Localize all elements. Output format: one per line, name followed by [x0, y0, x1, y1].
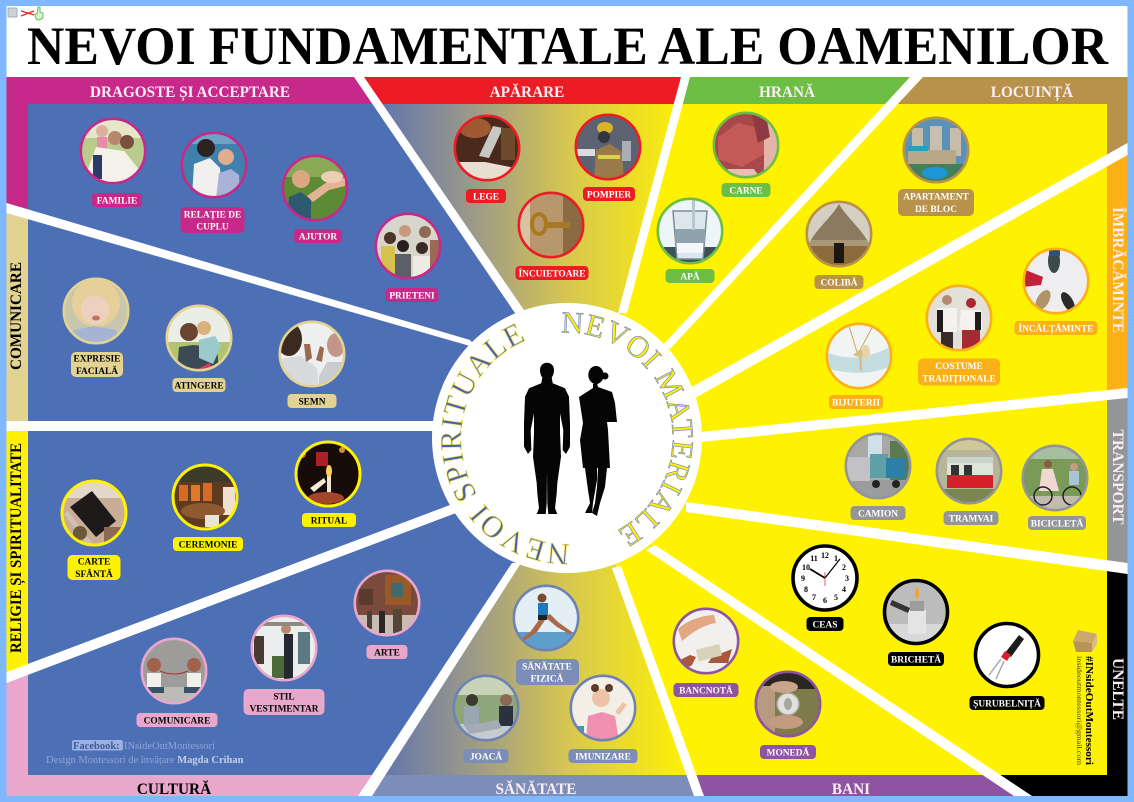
label: FAMILIE [97, 196, 137, 206]
label: SEMN [298, 398, 326, 408]
contact text: #INsideOutMontessori [1083, 656, 1095, 765]
label: STIL [273, 692, 295, 702]
label [898, 189, 974, 216]
label: CEAS [812, 620, 838, 630]
item: joaca [453, 675, 519, 763]
panel: transport [684, 398, 1128, 563]
label: BIJUTERII [832, 398, 880, 408]
label: CARTE [78, 558, 110, 568]
photo [454, 115, 520, 182]
heading: LOCUINȚĂ [991, 84, 1073, 101]
panel: imbracaminte [696, 155, 1128, 432]
panel: religie si spiritualitate [6, 431, 450, 672]
label: PRIETENI [389, 292, 435, 302]
icon: clock: 8 [804, 585, 808, 594]
item: moneda [755, 671, 821, 759]
photo [63, 278, 129, 344]
icon: clock: 2 [842, 563, 846, 572]
icon: clock [793, 546, 857, 610]
panel: dragoste si acceptare [6, 77, 516, 342]
item: ajutor [282, 155, 348, 243]
label: FIZICĂ [531, 672, 564, 684]
photo [166, 305, 232, 371]
label [244, 689, 324, 715]
item: bancnota [673, 608, 739, 697]
heading: HRANĂ [759, 84, 815, 101]
panel: aparare [364, 77, 681, 314]
label: SĂNĂTATE [522, 660, 572, 672]
item: lege [454, 115, 520, 203]
photo [926, 285, 992, 351]
photo [673, 608, 739, 674]
label: SFÂNTĂ [75, 568, 113, 580]
label: ÎNCUIETOARE [518, 268, 586, 280]
photo [354, 570, 420, 636]
item: apa [657, 198, 723, 283]
photo [295, 441, 361, 507]
item: semn [276, 321, 345, 408]
label [918, 358, 1000, 386]
label: RITUAL [311, 516, 347, 526]
item: imunizare [568, 675, 638, 763]
heading: RELIGIE ȘI SPIRITUALITATE [8, 443, 25, 653]
item: incaltaminte [1014, 248, 1098, 335]
item: bricheta [883, 579, 949, 666]
credit text [46, 740, 244, 766]
label: CARNE [729, 186, 763, 196]
title: NEVOI FUNDAMENTALE ALE OAMENILOR [27, 16, 1109, 76]
credit text: Facebook: [73, 741, 120, 752]
item: ritual [295, 441, 361, 527]
toolbar icons [8, 7, 43, 20]
credit text: INsideOutMontessori [124, 741, 215, 752]
photo [1022, 445, 1088, 511]
photo [657, 198, 723, 264]
label: RELAȚIE DE [184, 210, 241, 220]
photo [375, 213, 441, 279]
label: ȘURUBELNIȚĂ [973, 698, 1041, 710]
label: VESTIMENTAR [249, 704, 319, 714]
label [180, 207, 244, 233]
icon: clock: 12 [821, 551, 829, 560]
icon: clock: 9 [801, 574, 805, 583]
heading: DRAGOSTE ȘI ACCEPTARE [90, 84, 290, 101]
item: ceas [793, 546, 857, 631]
item: surubelnita [970, 622, 1044, 710]
label: BICICLETĂ [1031, 518, 1084, 530]
label [516, 659, 579, 685]
contact text: insideoutmontessori@gmail.com [1075, 656, 1084, 765]
photo [513, 585, 579, 651]
photo [570, 675, 636, 741]
icon: clock: 1 [834, 554, 838, 563]
heading: CULTURĂ [137, 781, 211, 798]
heading: ÎMBRĂCĂMINTE [1109, 207, 1126, 333]
label: POMPIER [587, 190, 631, 200]
label: APARTAMENT [903, 192, 969, 202]
photo [172, 464, 238, 530]
label [71, 352, 123, 377]
curved text: nevoi materiale: NEVOI MATERIALE [562, 312, 694, 547]
panel: sanatate [372, 564, 694, 796]
label: TRADIȚIONALE [922, 374, 996, 384]
heading: BANI [832, 781, 870, 798]
credit text: Design Montessori de învățare Magda Crihan [46, 755, 244, 766]
item: costume traditionale [918, 285, 1000, 386]
label: ATINGERE [174, 382, 224, 392]
heading: SĂNĂTATE [495, 781, 577, 798]
icon: clock: 6 [823, 596, 827, 605]
label: MONEDĂ [767, 746, 810, 758]
item: arte [354, 570, 420, 659]
item: relatie de cuplu [180, 132, 247, 233]
photo [974, 622, 1040, 688]
label: AJUTOR [299, 232, 337, 242]
label [68, 555, 120, 580]
label: CEREMONIE [179, 540, 237, 550]
photo [61, 480, 127, 546]
label: BRICHETĂ [891, 654, 941, 666]
item: expresie faciala [63, 278, 129, 377]
panel: comunicare [6, 213, 469, 421]
panel: unelte [649, 506, 1128, 796]
item: apartament de bloc [898, 117, 974, 216]
item: coliba [806, 201, 872, 289]
item: bicicleta [1022, 445, 1088, 530]
photo [903, 117, 969, 183]
label: TRAMVAI [949, 514, 994, 524]
icon: clock: 10 [802, 563, 810, 572]
curved text: nevoi spirituale: NEVOI SPIRITUALE [440, 323, 570, 565]
item: carne [713, 112, 779, 197]
label: LEGE [473, 192, 499, 202]
photo [282, 155, 348, 221]
icon: clock: 11 [810, 554, 818, 563]
item: stil vestimentar [244, 615, 324, 715]
icon: clock: 5 [834, 593, 838, 602]
label: APĂ [680, 270, 700, 282]
heading: COMUNICARE [8, 262, 25, 370]
item: carte sfanta [61, 480, 127, 580]
contact text [1075, 656, 1095, 765]
icon: clock: 4 [842, 585, 846, 594]
label: FACIALĂ [76, 365, 118, 377]
label: CAMION [858, 510, 898, 520]
heading: UNELTE [1109, 658, 1126, 720]
label: EXPRESIE [74, 354, 120, 364]
photo [826, 323, 892, 389]
label: IMUNIZARE [575, 752, 631, 762]
photo [276, 321, 345, 387]
panel: bani [615, 545, 1014, 796]
photo [845, 433, 911, 499]
photo [936, 438, 1002, 504]
label: CUPLU [196, 222, 229, 232]
item: incuietoare [516, 192, 588, 280]
label: ÎNCĂLȚĂMINTE [1018, 322, 1094, 334]
label: COLIBĂ [820, 276, 858, 288]
item: pompier [575, 114, 641, 201]
label: BANCNOTĂ [679, 684, 733, 696]
label: JOACĂ [470, 750, 502, 762]
label: COMUNICARE [144, 716, 210, 726]
item: comunicare [136, 638, 218, 727]
icon: man silhouette [524, 363, 570, 514]
item: familie [80, 118, 146, 207]
panel: cultura [6, 513, 516, 796]
photo [251, 615, 317, 681]
central circle [432, 303, 702, 573]
icon: woman silhouette [579, 366, 617, 516]
photo [575, 114, 641, 180]
label: ARTE [374, 648, 400, 658]
label: COSTUME [935, 362, 983, 372]
heading: TRANSPORT [1109, 430, 1126, 524]
photo [883, 579, 949, 645]
photo [1023, 248, 1089, 314]
photo [755, 671, 821, 737]
item: ceremonie [172, 464, 243, 551]
photo [806, 201, 872, 267]
panel: locuinta [666, 77, 1128, 387]
photo [80, 118, 146, 185]
item: sanatate fizica [513, 585, 579, 685]
logo: cardboard box [1073, 630, 1097, 652]
item: camion [845, 433, 911, 520]
icon: clock: 3 [845, 574, 849, 583]
item: prieteni [375, 213, 441, 302]
item: bijuterii [826, 323, 892, 409]
item: tramvai [936, 438, 1002, 525]
label: DE BLOC [915, 205, 957, 215]
photo [453, 675, 519, 741]
photo [181, 132, 247, 198]
icon: clock: 7 [812, 593, 816, 602]
photo [713, 112, 779, 178]
heading: APĂRARE [490, 84, 564, 101]
photo [141, 638, 207, 704]
photo [518, 192, 584, 258]
panel: hrana [622, 77, 910, 344]
item: atingere [166, 305, 232, 392]
